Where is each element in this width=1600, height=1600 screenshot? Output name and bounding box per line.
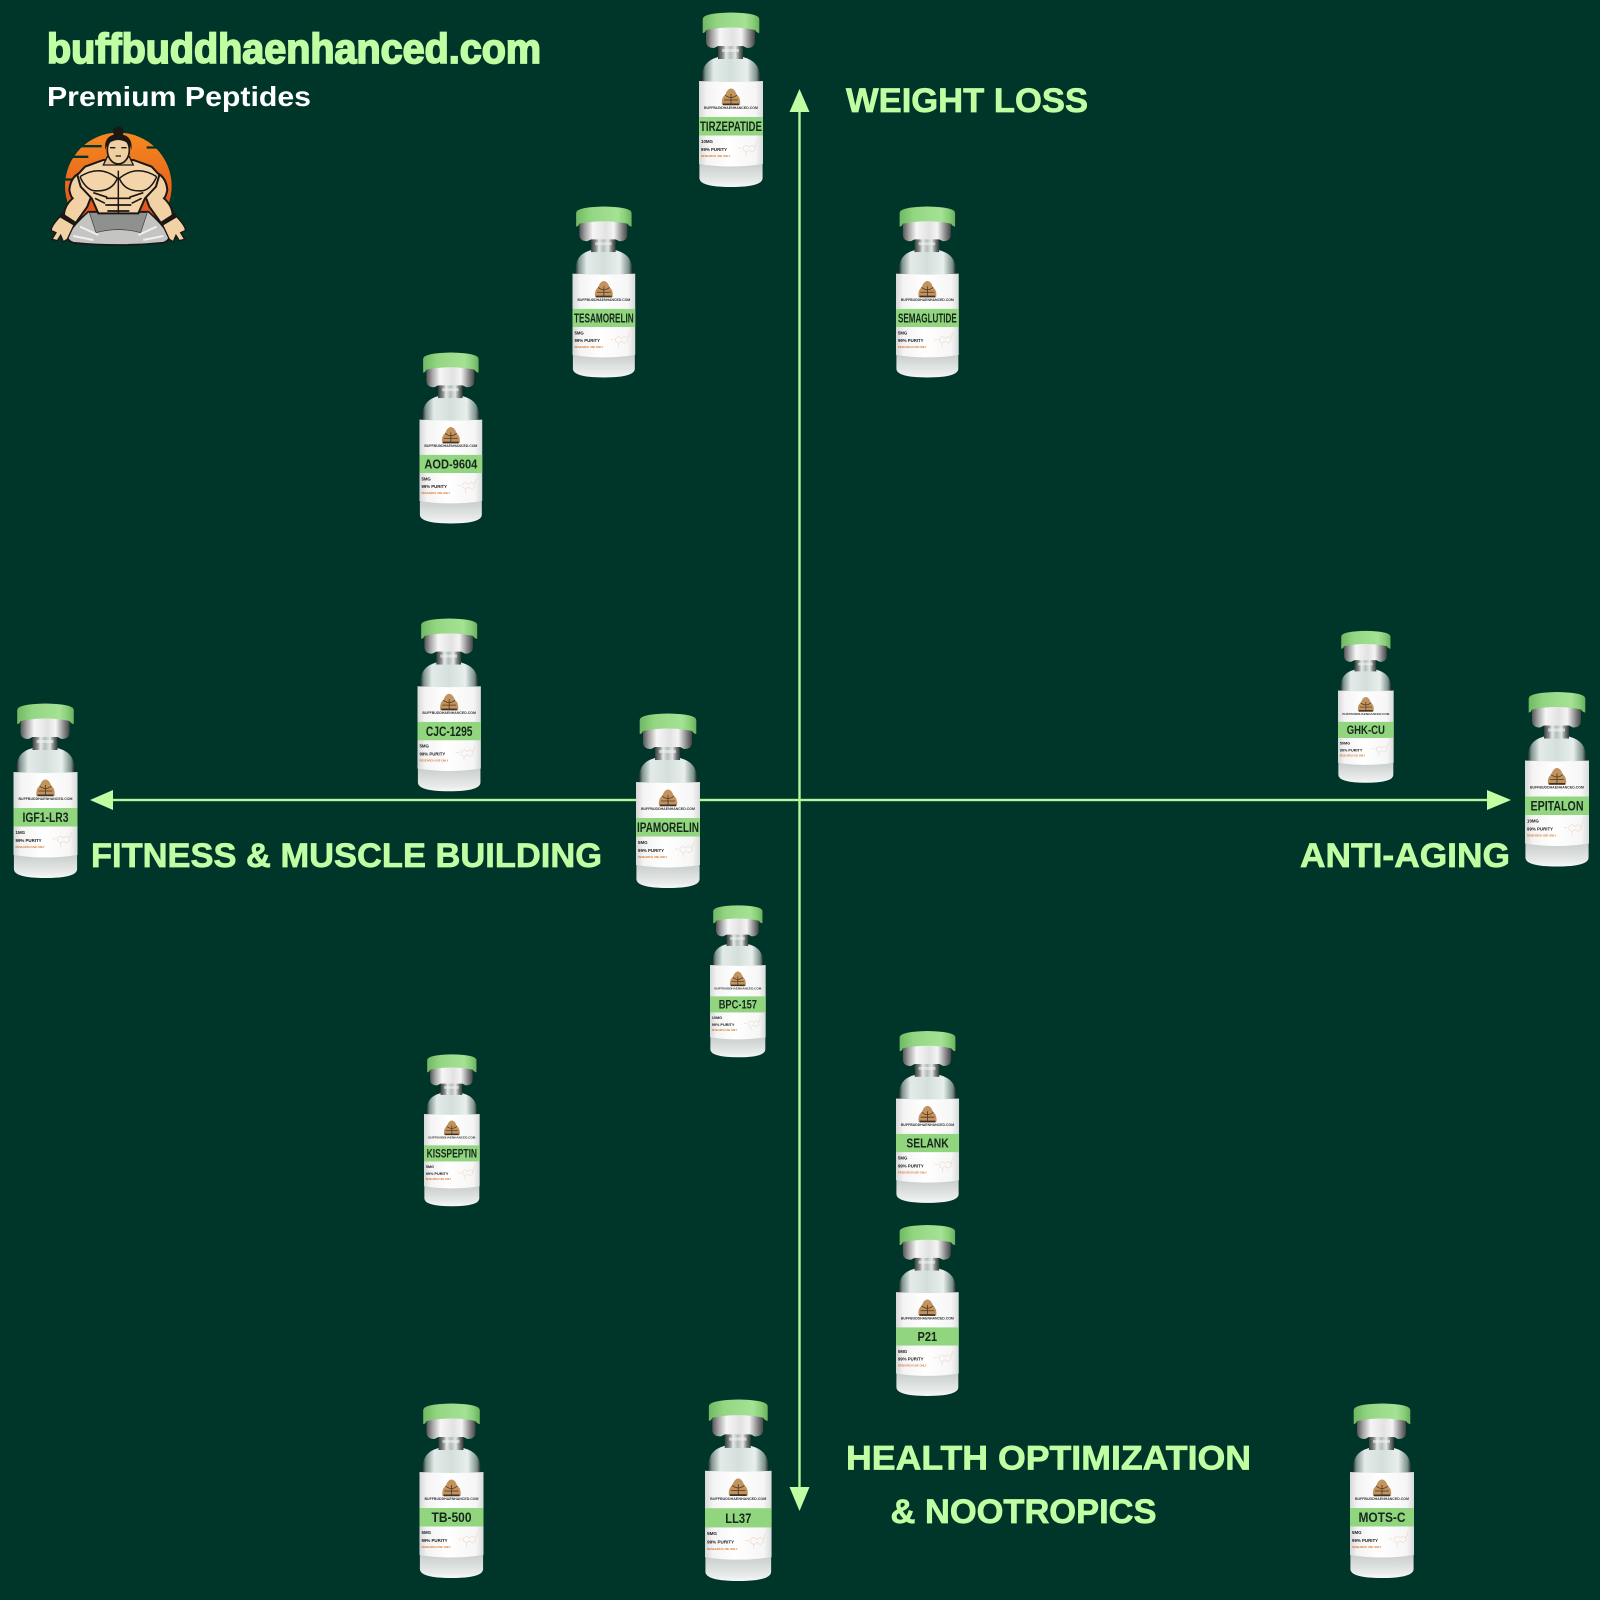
vial: GHK-CU: 50MG <box>1340 741 1350 745</box>
vial: Tirzepatide: BUFFBUDDHAENHANCED.COM <box>704 106 758 110</box>
vial: Semaglutide <box>896 206 959 378</box>
vial: CJC-1295: RESEARCH USE ONLY <box>419 759 449 763</box>
vial: MOTS-C: BUFFBUDDHAENHANCED.COM <box>1355 1497 1409 1501</box>
hands <box>51 217 74 242</box>
vial: Tesamorelin: 99% PURITY <box>574 338 600 343</box>
vial: Epitalon: BUFFBUDDHAENHANCED.COM <box>1530 786 1584 790</box>
vial: BPC-157: 99% PURITY <box>712 1023 735 1027</box>
vial: GHK-CU: BUFFBUDDHAENHANCED.COM <box>1342 712 1390 716</box>
right arm <box>142 172 173 224</box>
vial: CJC-1295 <box>418 618 481 791</box>
vial: Ipamorelin: RESEARCH USE ONLY <box>638 855 668 859</box>
vial: Kisspeptin: 99% PURITY <box>426 1172 449 1176</box>
vial: IGF1-LR3 <box>14 704 78 878</box>
vial: AOD-9604: BUFFBUDDHAENHANCED.COM <box>424 444 477 448</box>
vial: Tesamorelin: RESEARCH USE ONLY <box>574 345 603 349</box>
vial: GHK-CU: GHK-CU <box>1347 724 1385 737</box>
heading: health optimization and nootropics <box>846 1440 1251 1531</box>
vial: Epitalon <box>1525 692 1589 866</box>
vial: Epitalon: RESEARCH USE ONLY <box>1527 834 1557 838</box>
vial: BPC-157 <box>710 905 766 1057</box>
vial: Ipamorelin: IPAMORELIN <box>637 820 699 835</box>
vial: Epitalon: 99% PURITY <box>1527 826 1553 832</box>
vial: TB-500: 99% PURITY <box>422 1538 448 1543</box>
vial: CJC-1295: CJC-1295 <box>426 724 473 739</box>
vial: Tesamorelin: BUFFBUDDHAENHANCED.COM <box>577 298 630 302</box>
vial: IGF1-LR3: IGF1-LR3 <box>22 810 69 825</box>
horizontal axis arrow <box>90 790 1511 810</box>
vial: Tesamorelin: 5MG <box>574 330 584 335</box>
vial: Selank: RESEARCH USE ONLY <box>898 1170 927 1174</box>
vial: Semaglutide: SEMAGLUTIDE <box>898 311 957 326</box>
vial: TB-500: TB-500 <box>432 1510 472 1525</box>
vial: Kisspeptin: 5MG <box>426 1165 434 1169</box>
vial: Tesamorelin: TESAMORELIN <box>574 311 634 326</box>
vial: LL37 <box>705 1400 772 1581</box>
subtitle: Premium Peptides <box>47 81 311 112</box>
vial: TB-500: RESEARCH USE ONLY <box>422 1545 451 1549</box>
vial: AOD-9604: RESEARCH USE ONLY <box>421 491 450 495</box>
left arm <box>64 172 95 224</box>
vial: AOD-9604: AOD-9604 <box>424 457 478 472</box>
vial: Kisspeptin: RESEARCH USE ONLY <box>426 1178 452 1181</box>
vial: Selank: 99% PURITY <box>898 1163 924 1168</box>
vial: Kisspeptin: KISSPEPTIN <box>427 1148 477 1161</box>
vial: IGF1-LR3: BUFFBUDDHAENHANCED.COM <box>18 797 73 801</box>
vial: Tirzepatide: RESEARCH USE ONLY <box>701 154 731 158</box>
vial: Ipamorelin: 5MG <box>638 840 648 845</box>
vial: AOD-9604: 99% PURITY <box>421 484 447 489</box>
vial: Tirzepatide: 10MG <box>701 139 714 144</box>
vial: MOTS-C: MOTS-C <box>1358 1510 1406 1525</box>
vial: Epitalon: EPITALON <box>1530 798 1584 814</box>
vial: P21: 99% PURITY <box>898 1357 924 1362</box>
vial: GHK-CU <box>1338 631 1394 783</box>
vial: Tirzepatide: 99% PURITY <box>701 147 727 152</box>
vial: MOTS-C: 5MG <box>1352 1530 1362 1535</box>
legs and cloth <box>67 212 169 245</box>
vial: IGF1-LR3: 1MG <box>16 830 26 835</box>
vial: BPC-157: 10MG <box>712 1016 722 1020</box>
vial: Semaglutide: BUFFBUDDHAENHANCED.COM <box>901 298 954 302</box>
vial: Tirzepatide: TIRZEPATIDE <box>700 119 762 134</box>
neck and head <box>103 157 133 165</box>
vial: BPC-157: BPC-157 <box>719 999 757 1012</box>
heading: weight loss: WEIGHT LOSS <box>846 82 1088 120</box>
vial: Tesamorelin <box>572 206 635 378</box>
vial: CJC-1295: 99% PURITY <box>419 752 445 757</box>
vial: Selank <box>896 1031 959 1203</box>
site title: buffbuddhaenhanced.com <box>47 25 541 72</box>
vial: MOTS-C: 99% PURITY <box>1352 1538 1378 1543</box>
vial: Semaglutide: RESEARCH USE ONLY <box>898 345 927 349</box>
heading: anti-aging: ANTI-AGING <box>1300 837 1510 875</box>
vial: TB-500 <box>420 1404 484 1578</box>
vial: MOTS-C: RESEARCH USE ONLY <box>1352 1545 1382 1549</box>
heading: fitness and muscle building: FITNESS & MUSCLE BUILDING <box>91 837 602 875</box>
vial: CJC-1295: 5MG <box>419 744 430 749</box>
vial: TB-500: 5MG <box>422 1530 432 1535</box>
heading: health optimization and nootropics: & NOOTROPICS <box>890 1493 1156 1531</box>
vial: LL37: 99% PURITY <box>707 1540 734 1545</box>
vial: Kisspeptin: BUFFBUDDHAENHANCED.COM <box>428 1135 476 1139</box>
torso <box>77 160 159 213</box>
vial: CJC-1295: BUFFBUDDHAENHANCED.COM <box>422 711 476 715</box>
vial: Kisspeptin <box>424 1054 480 1206</box>
sun <box>65 133 172 239</box>
vial: Ipamorelin <box>636 714 700 888</box>
vial: IGF1-LR3: 99% PURITY <box>16 838 42 843</box>
vial: BPC-157: RESEARCH USE ONLY <box>712 1029 738 1032</box>
vial: LL37: LL37 <box>725 1510 751 1526</box>
vial: AOD-9604: 5MG <box>421 476 431 481</box>
vial: GHK-CU: RESEARCH USE ONLY <box>1340 755 1366 758</box>
wrist bands <box>61 214 176 224</box>
vial: P21: P21 <box>918 1329 937 1344</box>
vial: LL37: RESEARCH USE ONLY <box>707 1547 738 1551</box>
vial: GHK-CU: 99% PURITY <box>1340 748 1363 752</box>
vial: Selank: BUFFBUDDHAENHANCED.COM <box>901 1123 954 1127</box>
vial: LL37: BUFFBUDDHAENHANCED.COM <box>710 1497 766 1501</box>
vial: TB-500: BUFFBUDDHAENHANCED.COM <box>424 1497 479 1501</box>
vial: AOD-9604 <box>420 352 482 524</box>
vial: Ipamorelin: BUFFBUDDHAENHANCED.COM <box>641 807 695 811</box>
vial: P21: RESEARCH USE ONLY <box>898 1364 927 1368</box>
vial: Epitalon: 10MG <box>1527 818 1540 824</box>
vertical axis arrow <box>790 89 810 1511</box>
vial: Selank: SELANK <box>906 1136 949 1151</box>
vial: Ipamorelin: 99% PURITY <box>638 848 664 853</box>
vial: Selank: 5MG <box>898 1156 908 1161</box>
vial: Tirzepatide <box>699 12 763 187</box>
vial: P21: BUFFBUDDHAENHANCED.COM <box>901 1317 954 1321</box>
vial: P21 <box>896 1225 959 1396</box>
vial: BPC-157: BUFFBUDDHAENHANCED.COM <box>714 986 762 990</box>
vial: Semaglutide: 5MG <box>898 330 908 335</box>
heading: health optimization and nootropics: HEALTH OPTIMIZATION <box>846 1440 1251 1478</box>
vial: P21: 5MG <box>898 1349 908 1354</box>
icon: meditating muscular buddha logo <box>51 126 185 245</box>
vial: IGF1-LR3: RESEARCH USE ONLY <box>16 845 45 849</box>
vial: Semaglutide: 99% PURITY <box>898 338 924 343</box>
vial: LL37: 5MG <box>707 1531 717 1536</box>
vial: MOTS-C <box>1350 1404 1414 1578</box>
